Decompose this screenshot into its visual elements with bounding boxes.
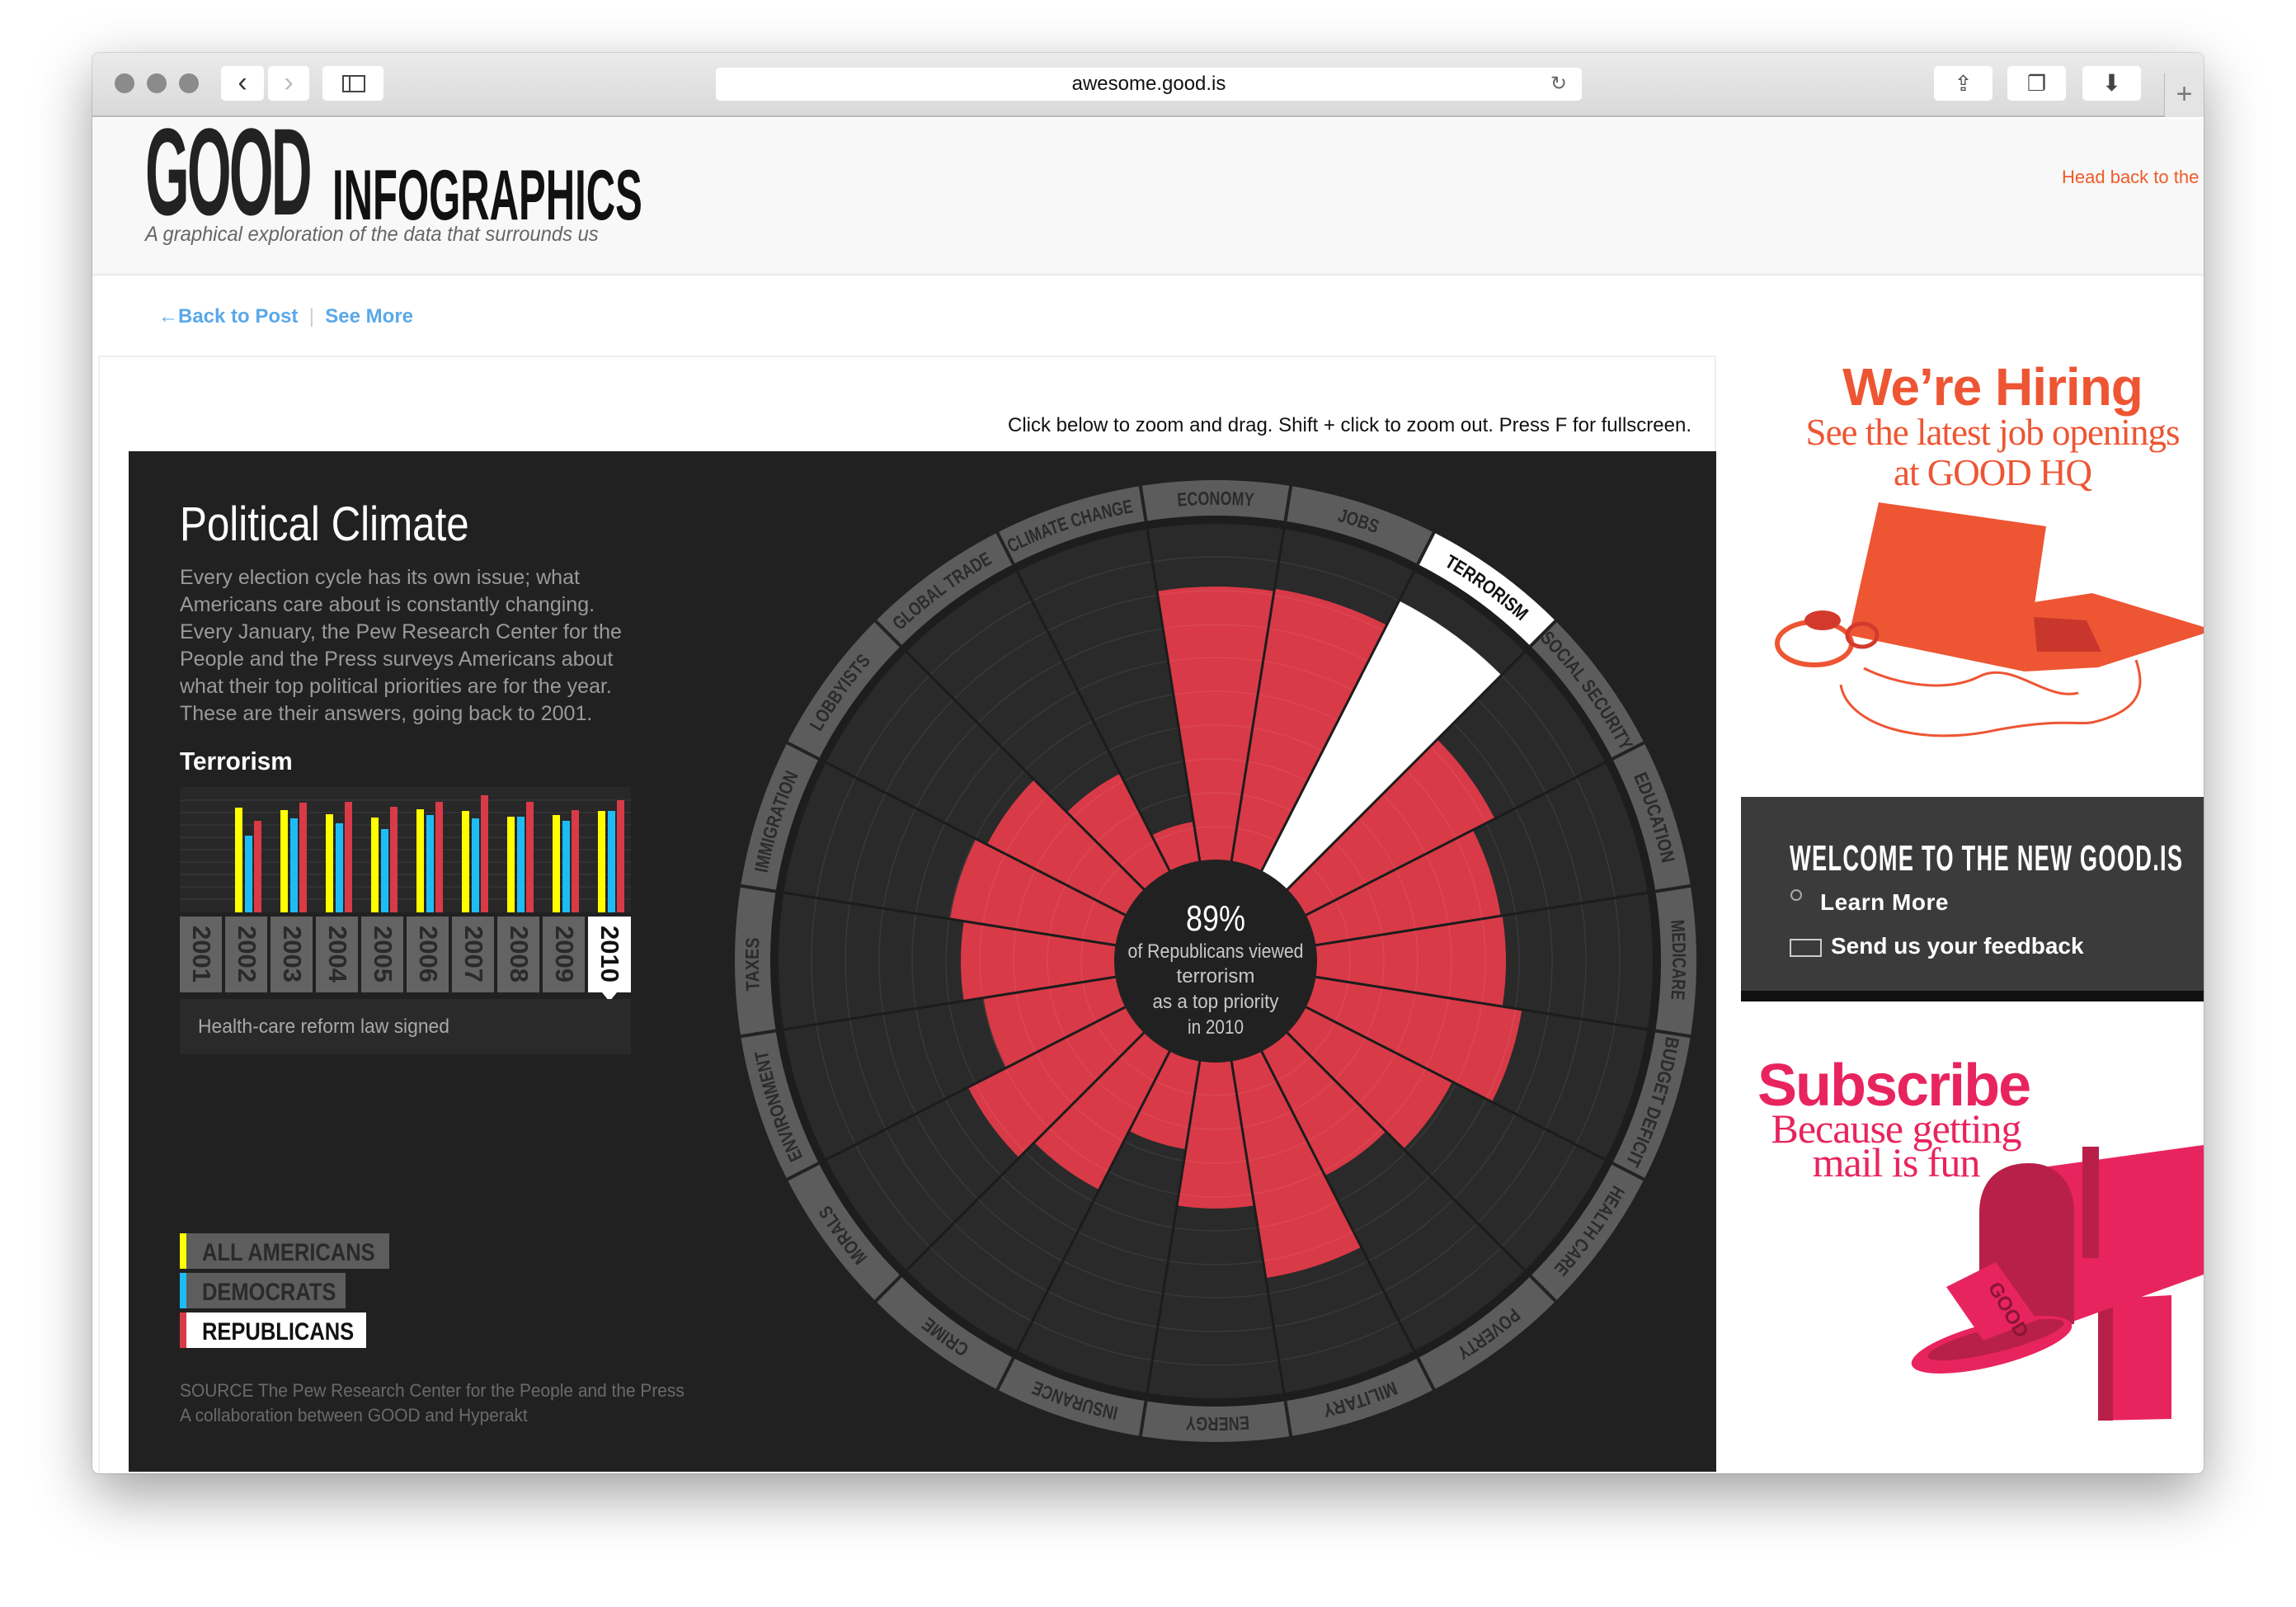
legend: all americans: ALL AMERICANS (202, 1239, 375, 1266)
head back link: Head back to the (2062, 167, 2199, 187)
nav buttons: ‹ (238, 67, 247, 98)
ring labels: ENVIRONMENT (754, 1053, 802, 1162)
sidebar: hiring ad (1775, 357, 2204, 738)
url bar (716, 68, 1582, 101)
hiring subtext: at GOOD HQ (1894, 452, 2091, 493)
subscribe subtext (1771, 1105, 2021, 1185)
ring labels: JOBS (1338, 509, 1379, 533)
icon: mailbox: GOOD (1983, 1279, 2033, 1342)
highlighted ring segment: terrorism (1426, 544, 1546, 634)
bars 2002-2010 (235, 795, 624, 912)
ring labels: ENERGY (1186, 1416, 1249, 1430)
nav buttons (221, 66, 264, 101)
legend: democrats: DEMOCRATS (202, 1279, 336, 1306)
ring labels: LOBBYISTS (810, 654, 869, 731)
icon: mailbox (1912, 1145, 2204, 1421)
polar chart (735, 480, 1696, 1442)
year tabs: 2009 (550, 926, 579, 983)
ring labels (746, 492, 1686, 1430)
intro text: Every election cycle has its own issue; what (180, 566, 580, 589)
content box (98, 356, 1716, 1473)
ring labels: TERRORISM (1447, 554, 1529, 620)
url bar: ↻ (1550, 73, 1567, 95)
year tabs: 2008 (505, 926, 534, 983)
ring labels: EDUCATION (1634, 772, 1675, 863)
subscribe heading: Subscribe (1757, 1053, 2030, 1119)
year tabs: 2003 (278, 926, 307, 983)
send feedback: Send us your feedback (1831, 933, 2084, 959)
learn more: Learn More (1820, 889, 1949, 915)
title: Political Climate (180, 497, 469, 551)
browser toolbar: + (2176, 78, 2192, 110)
ring labels: ECONOMY (1178, 492, 1254, 507)
instructions: Click below to zoom and drag. Shift + click to zoom out. Press F for fullscreen. (1008, 414, 1691, 436)
center callout (1114, 860, 1317, 1063)
legend: democrats (180, 1273, 346, 1308)
traffic lights (115, 73, 134, 93)
subscribe subtext: mail is fun (1813, 1139, 1979, 1185)
panel: political climate (129, 451, 1716, 1472)
source: SOURCE The Pew Research Center for the People and the Press (180, 1380, 685, 1401)
subscribe subtext: Because getting (1771, 1105, 2021, 1152)
legend: all americans (180, 1233, 389, 1269)
center callout: terrorism (1176, 965, 1255, 987)
icon: key (1790, 889, 1802, 901)
caption box (180, 999, 631, 1054)
right buttons (1934, 66, 1993, 101)
center callout: 89% (1186, 898, 1245, 939)
INFOGRAPHICS: INFOGRAPHICS (332, 156, 642, 235)
ring labels: MEDICARE (1671, 921, 1686, 1000)
source (180, 1380, 685, 1426)
ring labels: CRIME (921, 1317, 967, 1355)
legend: republicans (180, 1312, 366, 1348)
hiring heading: We’re Hiring (1842, 357, 2143, 417)
right buttons: ⇪ (1955, 71, 1972, 96)
ring labels: IMMIGRATION (754, 771, 798, 873)
intro text: These are their answers, going back to 2001. (180, 702, 592, 725)
sectors (947, 584, 1526, 1282)
ring labels: GLOBAL TRADE (894, 552, 992, 629)
intro text (180, 566, 622, 725)
icon: laptop with headphones (1775, 502, 2204, 738)
ring labels: POVERTY (1460, 1308, 1521, 1360)
legend: republicans: REPUBLICANS (202, 1318, 354, 1345)
intro text: what their top political priorities are for the year. (180, 675, 612, 698)
tagline: A graphical exploration of the data that surrounds us (145, 223, 599, 246)
sidebar: subscribe ad (1757, 1053, 2204, 1421)
url bar: awesome.good.is (1072, 73, 1226, 95)
icon: envelope (1790, 939, 1822, 957)
ring labels: SOCIAL SECURITY (1541, 632, 1633, 748)
browser toolbar: ⬇ (2102, 70, 2121, 96)
hiring subtext (1806, 412, 2179, 493)
ring labels: INSURANCE (1031, 1381, 1118, 1420)
ring labels: BUDGET DEFICIT (1627, 1037, 1679, 1168)
ring labels: MORALS (820, 1206, 868, 1265)
bar chart: terrorism by year: Health-care reform law signed (198, 1016, 449, 1038)
year tabs: 2002 (233, 926, 261, 983)
center callout: of Republicans viewed (1128, 940, 1303, 963)
year tabs: 2006 (414, 926, 443, 983)
heading: terrorism: Terrorism (180, 747, 293, 775)
ring labels: CLIMATE CHANGE (1008, 500, 1133, 551)
sidebar: welcome box (1741, 797, 2204, 1001)
year tabs: 2004 (323, 926, 352, 983)
ring labels: MILITARY (1325, 1382, 1398, 1417)
browser toolbar: › (284, 67, 294, 98)
bar chart: terrorism by year (180, 795, 631, 1054)
header (92, 119, 2204, 276)
nav links: ←Back to Post | See More (158, 305, 413, 328)
year tabs: 2005 (369, 926, 398, 983)
ring labels: TAXES (746, 938, 760, 992)
year tabs: 2001 (187, 926, 216, 983)
center callout: in 2010 (1188, 1016, 1244, 1039)
welcome heading: WELCOME TO THE NEW GOOD.IS (1790, 838, 2183, 879)
center callout: as a top priority (1153, 991, 1278, 1013)
source: A collaboration between GOOD and Hyperakt (180, 1405, 528, 1426)
year tabs (180, 917, 631, 1001)
hiring subtext: See the latest job openings (1806, 412, 2179, 453)
logo GOOD: GOOD (145, 102, 310, 241)
year tabs: 2010 (595, 926, 624, 983)
intro text: Every January, the Pew Research Center for the (180, 620, 622, 643)
ring labels: HEALTH CARE (1554, 1185, 1625, 1277)
browser toolbar: ❐ (2027, 71, 2046, 96)
browser toolbar (92, 53, 2204, 117)
legend (180, 1233, 389, 1348)
year tabs: 2007 (459, 926, 488, 983)
intro text: People and the Press surveys Americans about (180, 648, 613, 671)
intro text: Americans care about is constantly changing. (180, 593, 595, 616)
